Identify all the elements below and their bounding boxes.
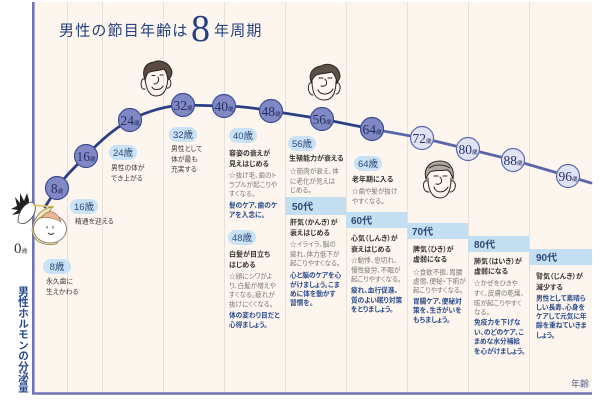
text block: age 32: 男性として [171, 144, 202, 153]
text block: age 8: 8歳 [50, 261, 65, 273]
icon: elderly man face [423, 161, 455, 198]
age markers on curve: 88歳 [503, 153, 523, 168]
text block: age 40 [229, 128, 278, 219]
text block: age 64: 老年期に入る [352, 174, 394, 184]
text block: age 48: すくなる。疲れが [229, 290, 275, 299]
text block: age 56: 生殖能力が衰える [289, 154, 344, 162]
text block: age 48: ☆顔にシワがよ [229, 272, 272, 280]
vertical axis label: 男性ホルモンの分泌量 [17, 286, 29, 393]
title: 年周期 [214, 22, 263, 40]
age markers on curve: 32歳 [173, 98, 193, 113]
text block: age 32: 体が最も [171, 154, 198, 164]
age markers on curve: 24歳 [120, 113, 140, 128]
text block: age 48 [228, 230, 280, 329]
age markers on curve: 64歳 [362, 122, 382, 137]
text block: age 40: アを入念に。 [229, 210, 265, 219]
icon: stork carrying baby [11, 193, 66, 245]
text block: age 40: すくなる。 [229, 190, 255, 198]
panel: 50s [285, 197, 346, 307]
age markers on curve: 80歳 [458, 142, 478, 157]
text block: age 56: に老化が見えは [290, 176, 336, 186]
panel: 90s: 腎気（じんき）が [536, 272, 583, 280]
panel: 60s: をとりましょう。 [351, 304, 393, 314]
panel: 60s [346, 212, 407, 314]
text block: age 16: 精通を迎える [75, 216, 114, 226]
text block: age 32: 充実する [171, 164, 197, 174]
age markers on curve [46, 94, 580, 200]
panel: 50s: 肝気（かんき）が [290, 218, 338, 226]
panel: 90s: 男性として素晴ら [536, 294, 586, 302]
age markers on curve: 72歳 [412, 131, 432, 146]
title [59, 8, 263, 50]
panel: 60s: 起こりやすくなる。 [351, 276, 401, 284]
panel: 80s: 80代 [474, 239, 495, 251]
panel: 80s: なる。 [474, 308, 490, 316]
panel: 80s: 虚弱になる [474, 266, 508, 276]
text block: age 56: じめる。 [290, 186, 312, 194]
panel: 60s: ☆動悸、息切れ、 [351, 256, 397, 264]
text block: age 8 [43, 259, 78, 296]
panel: 80s: 免疫力を下げな [474, 318, 521, 326]
panel: 50s: 心と脳のケアを心 [290, 270, 342, 280]
text block: age 48: り、白髪が増えや [229, 281, 277, 290]
age markers on curve: 16歳 [76, 149, 96, 164]
text block: age 24: 24歳 [113, 147, 134, 159]
panel: 90s [529, 249, 592, 340]
panel: 70s: ☆食欲不振、胃腸 [413, 268, 463, 276]
panel: 70s [407, 223, 468, 324]
panel: 90s: ケアして元気に年 [536, 312, 587, 320]
text block: age 48: 心得ましょう。 [229, 320, 267, 329]
icon: young man face [141, 61, 172, 96]
title: 8 [191, 8, 210, 50]
age markers on curve: 56歳 [312, 112, 332, 127]
panel: 80s: ☆かぜをひきや [474, 280, 518, 288]
panel: 60s: 衰えはじめる [351, 244, 391, 254]
panel: 70s: 虚弱になる [413, 254, 447, 264]
text block: age 56: ☆筋肉が衰え、体 [290, 166, 339, 176]
age markers on curve: 48歳 [261, 104, 281, 119]
baby in bundle [32, 207, 66, 245]
text block: age 32: 32歳 [173, 129, 194, 141]
panel: 70s: もちましょう。 [413, 315, 450, 324]
panel: 80s: まめな水分補給 [474, 336, 520, 346]
text block: age 24: 男性の体が [111, 163, 145, 172]
panel: 50s: ☆イライラ、脳の [290, 240, 336, 248]
panel: 70s: 脾気（ひき）が [413, 244, 454, 254]
panel: 70s: 70代 [412, 226, 433, 238]
panel: 80s [468, 236, 529, 356]
text block: age 64: 64歳 [358, 158, 379, 170]
panel: 50s: めに体を動かす [290, 289, 336, 298]
text block: age 24: でき上がる [111, 174, 143, 182]
x axis label: 年齢 [571, 378, 589, 389]
panel: 90s: しい長寿、心身を [536, 302, 585, 312]
text block: age 40: 髪のケア、歯のケ [229, 200, 278, 210]
panel: 60s: 60代 [351, 215, 372, 227]
icon: middle-aged man face [308, 64, 340, 100]
text block: age 56 [288, 136, 344, 194]
hormone curve [45, 105, 591, 207]
age markers on curve: 96歳 [558, 169, 578, 184]
text block: age 40: 見えはじめる [229, 159, 269, 168]
panel: 90s: 90代 [536, 252, 557, 264]
panel: 70s: 虚弱、便秘・下痢が [413, 276, 466, 286]
panel: 80s: 咳が起こりやすく [474, 298, 522, 308]
text block: age 32 [169, 127, 202, 174]
panel: 70s: 起こりやすくなる。 [413, 286, 463, 294]
text block: age 8: 永久歯に [46, 276, 73, 286]
panel: 90s: しょう。 [536, 330, 555, 340]
text block: age 40: ラブルが起こりや [229, 180, 278, 189]
panel: 80s: い、のどのケア、こ [474, 328, 524, 336]
panel: 80s: を心がけましょう。 [474, 346, 525, 356]
panel: 50s: 50代 [292, 201, 313, 213]
text block: age 64 [352, 156, 398, 206]
panel: 80s: すく、皮膚の乾燥、 [474, 288, 524, 298]
panel: 70s: 策を、生きがいを [413, 306, 462, 314]
zero label: 0歳 [14, 241, 28, 257]
text block: age 8: 生えかわる [46, 287, 78, 296]
panel: 90s: 齢を重ねていきま [536, 320, 587, 330]
text block: age 48: 白髪が目立ち [229, 250, 271, 258]
panel: 50s: 起こりやすくなる。 [290, 260, 340, 268]
panel: 50s: 衰えはじめる [290, 228, 330, 237]
panel: 50s: 疲れ、体力低下が [290, 250, 340, 258]
text block: age 24 [109, 145, 145, 182]
panel: 60s: 質のよい眠り対策 [351, 296, 403, 304]
text block: age 48: 体の変わり目だと [229, 310, 280, 320]
panel: 50s: がけましょう。こま [290, 280, 340, 289]
text block: age 40: 容姿の衰えが [229, 148, 270, 158]
panel: 80s: 肺気（はいき）が [474, 256, 522, 266]
age markers on curve: 40歳 [214, 99, 234, 114]
text block: age 48: 抜けにくくなる。 [229, 300, 273, 308]
text block: age 64: やすくなる。 [352, 198, 384, 206]
text block: age 48: はじめる [229, 261, 256, 269]
text block: age 40: ☆抜け毛、歯のト [229, 170, 277, 180]
panel: 60s: 疲れ、血行促進、 [351, 286, 398, 294]
text block: age 16: 16歳 [74, 201, 95, 213]
text block: age 16 [70, 199, 114, 226]
title: 男性の節目年齢は [59, 22, 189, 40]
panel: 50s: 習慣を。 [290, 298, 313, 307]
panel: 60s: 心気（しんき）が [351, 234, 398, 242]
text block: age 40: 40歳 [233, 130, 254, 142]
text block: age 56: 56歳 [292, 138, 313, 150]
age markers on curve: 8歳 [51, 181, 64, 196]
stork wings and body [11, 193, 54, 224]
text block: age 48: 48歳 [232, 232, 253, 244]
text block: age 64: ☆歯や髪が抜け [352, 186, 398, 196]
panel: 90s: 減少する [536, 282, 563, 292]
panel: 70s: 胃腸ケア、便秘対 [413, 296, 462, 306]
panel: 60s: 慢性疲労、不眠が [351, 266, 401, 274]
